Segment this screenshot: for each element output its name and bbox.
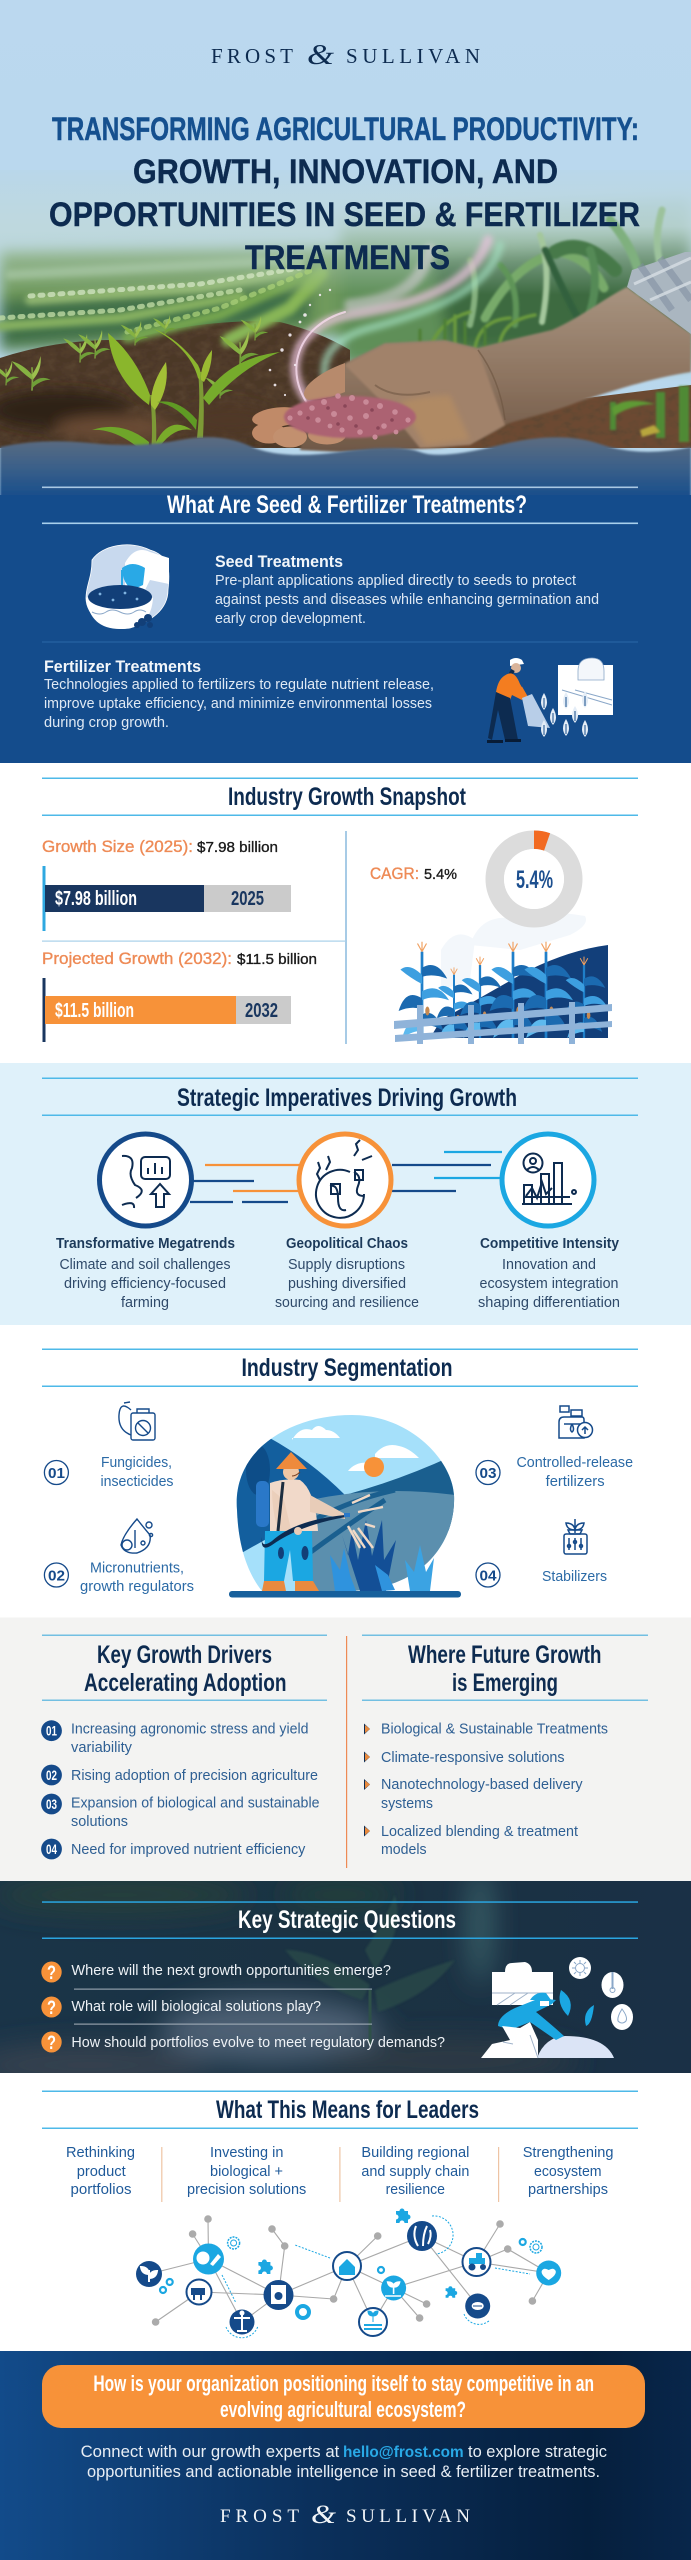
list: future growth areas: Nanotechnology-based delivery xyxy=(381,1777,583,1793)
text: projected growth: $11.5 billion xyxy=(237,952,317,968)
text: transformative megatrends: driving efficiency-focused xyxy=(64,1276,226,1292)
text: competitive intensity: Competitive Intensity xyxy=(480,1236,619,1252)
text: strengthening partnerships: ecosystem xyxy=(534,2163,602,2180)
title: GROWTH, INNOVATION, AND xyxy=(133,153,558,191)
text: fertilizer treatments: Fertilizer Treatments xyxy=(44,658,201,676)
logo: Frost & Sullivan bottom xyxy=(220,2500,470,2529)
bar chart: 2025 xyxy=(42,866,291,931)
text: strengthening partnerships: Strengthening xyxy=(523,2144,614,2161)
logo: Frost & Sullivan top: FROST xyxy=(211,44,293,68)
corn behind hand xyxy=(420,210,668,348)
list: questions: ? xyxy=(47,1963,56,1984)
list: growth drivers: variability xyxy=(71,1740,133,1756)
heading: where future growth xyxy=(408,1641,602,1697)
list: growth drivers: Need for improved nutrient efficiency xyxy=(71,1842,306,1858)
text: rethinking portfolios: portfolios xyxy=(70,2181,132,2198)
list: future growth areas xyxy=(364,1722,608,1858)
icon: competitive intensity xyxy=(502,1134,594,1226)
text: competitive intensity xyxy=(478,1236,620,1311)
callout: competitive question: evolving agricultural ecosystem? xyxy=(220,2397,466,2422)
bar chart: 2025: $7.98 billion xyxy=(55,888,137,910)
text: fertilizer treatments: during crop growth. xyxy=(44,715,169,731)
text: investing: biological + xyxy=(210,2163,283,2180)
text: building resilience xyxy=(361,2144,469,2198)
chart: CAGR donut xyxy=(486,830,583,928)
network nodes xyxy=(136,2208,561,2336)
segment 03: controlled-release fertilizers: Controlled-release xyxy=(516,1455,633,1471)
list: questions: What role will biological solutions play? xyxy=(71,1998,321,2015)
crop stems lower right xyxy=(610,386,689,442)
text: building resilience: and supply chain xyxy=(361,2163,469,2180)
heading: industry segmentation: Industry Segmentation xyxy=(242,1354,452,1382)
text: geopolitical chaos: Geopolitical Chaos xyxy=(286,1236,408,1252)
illustration: farmer spraying crops xyxy=(229,1410,461,1600)
text: contact: hello@frost.com xyxy=(343,2444,464,2461)
list: growth drivers: Increasing agronomic stress and yield xyxy=(71,1722,308,1738)
list: future growth areas: systems xyxy=(381,1796,433,1812)
text: competitive intensity: shaping differentiation xyxy=(478,1295,620,1311)
segment 04: stabilizers: 04 xyxy=(480,1568,497,1584)
segment 01: fungicides xyxy=(44,1402,174,1490)
heading: where future growth: is Emerging xyxy=(452,1669,558,1697)
list: growth drivers xyxy=(41,1720,319,1859)
text: CAGR: CAGR: xyxy=(370,865,419,883)
segment 02: micronutrients: Micronutrients, xyxy=(90,1560,184,1576)
title: TREATMENTS xyxy=(245,239,450,277)
logo: Frost & Sullivan bottom: & xyxy=(311,2500,337,2529)
text: CAGR xyxy=(370,865,457,883)
text: contact xyxy=(81,2443,607,2481)
callout: competitive question xyxy=(42,2365,645,2428)
list: future growth areas: models xyxy=(381,1842,427,1858)
text: competitive intensity: Innovation and xyxy=(502,1257,596,1273)
panel: industry segmentation xyxy=(42,1348,638,1598)
list: future growth areas: Climate-responsive solutions xyxy=(381,1750,565,1766)
segment 01: fungicides: 01 xyxy=(48,1465,65,1482)
logo: Frost & Sullivan bottom: SULLIVAN xyxy=(346,2506,470,2527)
text: seed treatments xyxy=(215,553,599,627)
list: growth drivers: Expansion of biological and sustainable xyxy=(71,1796,320,1812)
text: rethinking portfolios xyxy=(66,2144,135,2198)
segment 01: fungicides: insecticides xyxy=(100,1474,174,1490)
list: questions: Where will the next growth opportunities emerge? xyxy=(71,1962,391,1979)
icon: geopolitical chaos xyxy=(299,1134,391,1226)
text: transformative megatrends: Transformative Megatrends xyxy=(56,1236,235,1252)
connector lines xyxy=(190,1152,502,1202)
panel: industry growth snapshot xyxy=(0,763,691,1063)
text: building resilience: resilience xyxy=(386,2181,445,2198)
panel: what are seed and fertilizer treatments xyxy=(0,486,691,763)
text: projected growth: Projected Growth (2032): xyxy=(42,950,232,968)
text: competitive intensity: ecosystem integration xyxy=(480,1276,619,1292)
list: questions xyxy=(41,1962,445,2054)
segment 02: micronutrients xyxy=(44,1519,194,1595)
text: fertilizer treatments: improve uptake efficiency, and minimize environmental losses xyxy=(44,696,432,712)
list: growth drivers: 04 xyxy=(46,1842,57,1857)
segment 02: micronutrients: 02 xyxy=(48,1568,65,1584)
icon: corn field xyxy=(394,912,612,1044)
text: fertilizer treatments: Technologies applied to fertilizers to regulate nutrient release, xyxy=(44,677,434,693)
title xyxy=(49,111,640,277)
text: seed treatments: Seed Treatments xyxy=(215,553,343,571)
icon: fertilizer swirl xyxy=(295,240,500,412)
list: growth drivers: solutions xyxy=(71,1814,128,1830)
text: projected growth xyxy=(42,950,317,968)
text: transformative megatrends: farming xyxy=(121,1295,169,1311)
heading: growth snapshot: Industry Growth Snapshot xyxy=(228,783,467,811)
segment 03: controlled-release fertilizers: 03 xyxy=(480,1465,496,1482)
soil xyxy=(0,321,691,448)
bar chart: 2032: 2032 xyxy=(245,1000,278,1022)
text: investing: Investing in xyxy=(210,2144,283,2161)
text: strengthening partnerships xyxy=(523,2144,614,2198)
text: fertilizer treatments xyxy=(44,658,434,731)
list: growth drivers: 03 xyxy=(46,1797,57,1812)
text: transformative megatrends xyxy=(56,1236,235,1311)
text: strengthening partnerships: partnerships xyxy=(528,2181,608,2198)
text: seed treatments: against pests and diseases while enhancing germination and xyxy=(215,592,599,608)
text: building resilience: Building regional xyxy=(361,2144,469,2161)
text: investing: precision solutions xyxy=(187,2181,306,2198)
segment 01: fungicides: Fungicides, xyxy=(101,1455,172,1471)
text: growth size xyxy=(42,838,278,856)
panel: key strategic questions xyxy=(0,1881,691,2073)
bar chart: 2032 xyxy=(42,978,291,1042)
segment 02: micronutrients: growth regulators xyxy=(80,1579,194,1595)
text: geopolitical chaos: pushing diversified xyxy=(288,1276,406,1292)
logo: Frost & Sullivan top xyxy=(211,40,480,71)
heading: what are treatments: What Are Seed & Fertilizer Treatments? xyxy=(167,491,527,519)
list: questions: ? xyxy=(47,1998,56,2019)
list: growth drivers: 02 xyxy=(46,1768,57,1783)
heading: strategic imperatives: Strategic Imperatives Driving Growth xyxy=(177,1084,517,1112)
list: growth drivers: Rising adoption of precision agriculture xyxy=(71,1768,318,1784)
heading: key growth drivers: Accelerating Adoption xyxy=(84,1669,286,1697)
panel: growth drivers and future growth xyxy=(0,1618,691,1881)
text: growth size: Growth Size (2025): xyxy=(42,838,193,856)
bar chart: 2032: $11.5 billion xyxy=(55,1000,134,1022)
icon: hand holding granules xyxy=(251,252,691,452)
icon: farmer with seeds xyxy=(487,658,613,743)
text: geopolitical chaos: Supply disruptions xyxy=(288,1257,405,1273)
segment 03: controlled-release fertilizers xyxy=(476,1406,633,1490)
text: contact: Connect with our growth experts at xyxy=(81,2443,340,2461)
text: rethinking portfolios: product xyxy=(77,2163,127,2180)
panel: strategic imperatives xyxy=(0,1063,691,1325)
bar chart: 2025: 2025 xyxy=(231,888,264,910)
text: seed treatments: early crop development. xyxy=(215,611,366,627)
heading: leaders: What This Means for Leaders xyxy=(216,2096,479,2124)
text: geopolitical chaos xyxy=(275,1236,419,1311)
text: investing xyxy=(187,2144,306,2198)
list: future growth areas: Localized blending & treatment xyxy=(381,1824,578,1840)
text: transformative megatrends: Climate and soil challenges xyxy=(60,1257,230,1273)
panel: hero banner xyxy=(0,0,691,500)
heading: key growth drivers xyxy=(84,1641,286,1697)
icon: seed bowl xyxy=(86,545,169,629)
list: growth drivers: 01 xyxy=(46,1724,57,1739)
text: seed treatments: Pre-plant applications applied directly to seeds to protect xyxy=(215,573,576,589)
icon: corn seedlings xyxy=(0,315,280,446)
text: rethinking portfolios: Rethinking xyxy=(66,2144,135,2161)
heading: key growth drivers: Key Growth Drivers xyxy=(97,1641,272,1669)
text: contact: opportunities and actionable intelligence in seed & fertilizer treatments. xyxy=(87,2463,600,2481)
list: questions: How should portfolios evolve to meet regulatory demands? xyxy=(71,2034,445,2051)
logo: Frost & Sullivan top: & xyxy=(307,40,334,71)
logo: Frost & Sullivan bottom: FROST xyxy=(220,2506,299,2527)
text: growth size: $7.98 billion xyxy=(197,840,278,856)
text: contact: to explore strategic xyxy=(468,2443,607,2461)
panel: what this means for leaders xyxy=(0,2073,691,2351)
text: geopolitical chaos: sourcing and resilience xyxy=(275,1295,419,1311)
segment 04: stabilizers: Stabilizers xyxy=(542,1569,607,1585)
icon: transformative megatrends xyxy=(100,1134,192,1226)
heading: where future growth: Where Future Growth xyxy=(408,1641,602,1669)
illustration: farmer planting xyxy=(481,1957,633,2058)
segment 03: controlled-release fertilizers: fertilizers xyxy=(546,1474,605,1490)
logo: Frost & Sullivan top: SULLIVAN xyxy=(346,44,480,68)
list: future growth areas: Biological & Sustainable Treatments xyxy=(381,1722,608,1738)
segment 04: stabilizers xyxy=(476,1519,607,1587)
list: questions: ? xyxy=(47,2033,56,2054)
text: CAGR: 5.4% xyxy=(424,867,457,883)
panel: call to action xyxy=(0,2351,691,2560)
chart: agricultural ecosystem network xyxy=(136,2208,561,2338)
chart: CAGR donut: 5.4% xyxy=(516,866,553,894)
heading: key strategic questions: Key Strategic Questions xyxy=(238,1906,456,1934)
